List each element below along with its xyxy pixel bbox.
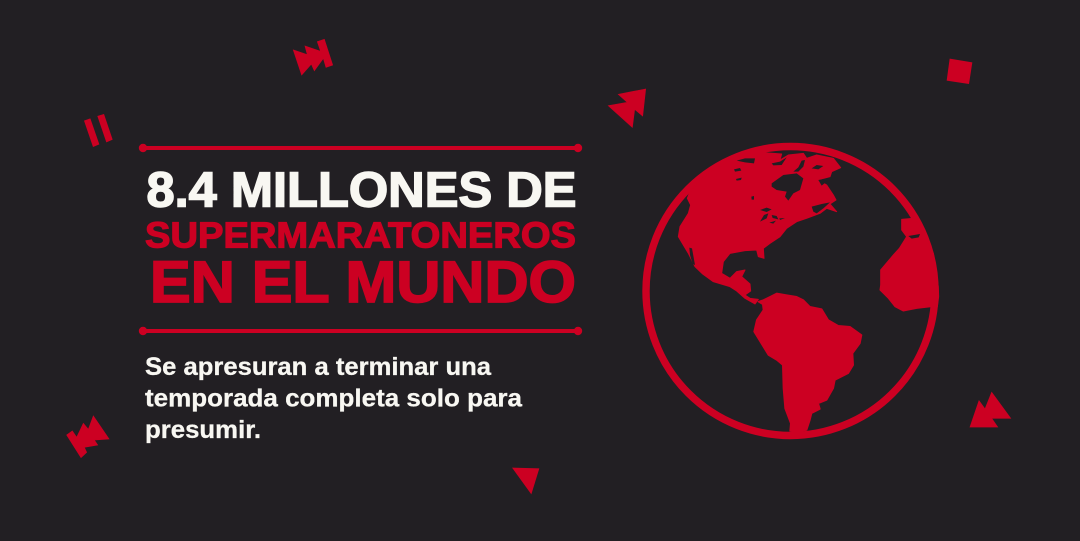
top rule <box>139 144 582 152</box>
icon: play triangle <box>512 468 539 494</box>
title <box>145 164 576 315</box>
globe <box>646 146 939 436</box>
north america <box>678 153 841 304</box>
icon: double arrow top center <box>608 89 646 127</box>
icon: rewind bottom left <box>67 416 109 458</box>
africa cutout <box>908 234 920 239</box>
body text: temporada completa solo para <box>145 384 523 412</box>
body text: Se apresuran a terminar una <box>145 353 492 381</box>
body text: presumir. <box>145 416 261 444</box>
body text <box>145 353 523 444</box>
title line: 8.4 millones de: 8.4 MILLONES DE <box>146 164 576 218</box>
africa <box>880 218 939 311</box>
globe ring <box>646 146 935 436</box>
title line: supermaratoneros: SUPERMARATONEROS <box>145 215 576 256</box>
south america <box>754 293 862 432</box>
icon: pause <box>84 114 113 147</box>
icon: fast-forward top <box>293 39 333 75</box>
title line: en el mundo: EN EL MUNDO <box>150 250 576 315</box>
arctic and lake cutouts <box>689 157 830 265</box>
bottom rule <box>139 327 582 335</box>
icon: double arrow bottom right <box>970 392 1011 427</box>
icon: stop square <box>947 59 972 84</box>
